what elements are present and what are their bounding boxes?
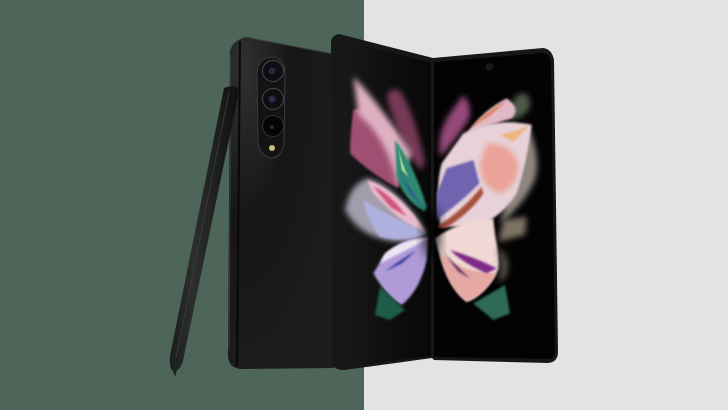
butterfly centre shadow bbox=[425, 208, 438, 258]
front camera bbox=[486, 63, 494, 71]
right screen bbox=[434, 53, 555, 359]
left screen bbox=[339, 40, 431, 367]
stylus pen bbox=[170, 86, 238, 377]
front of phone, unfolded bbox=[331, 34, 558, 370]
phone frame bbox=[331, 34, 558, 370]
background: light grey right panel bbox=[364, 0, 728, 410]
butterfly wallpaper bbox=[345, 77, 537, 320]
background: green left panel bbox=[0, 0, 364, 410]
back of phone bbox=[228, 37, 334, 369]
camera module bbox=[257, 57, 285, 158]
right wing bbox=[435, 93, 537, 320]
left wing bbox=[345, 77, 428, 320]
